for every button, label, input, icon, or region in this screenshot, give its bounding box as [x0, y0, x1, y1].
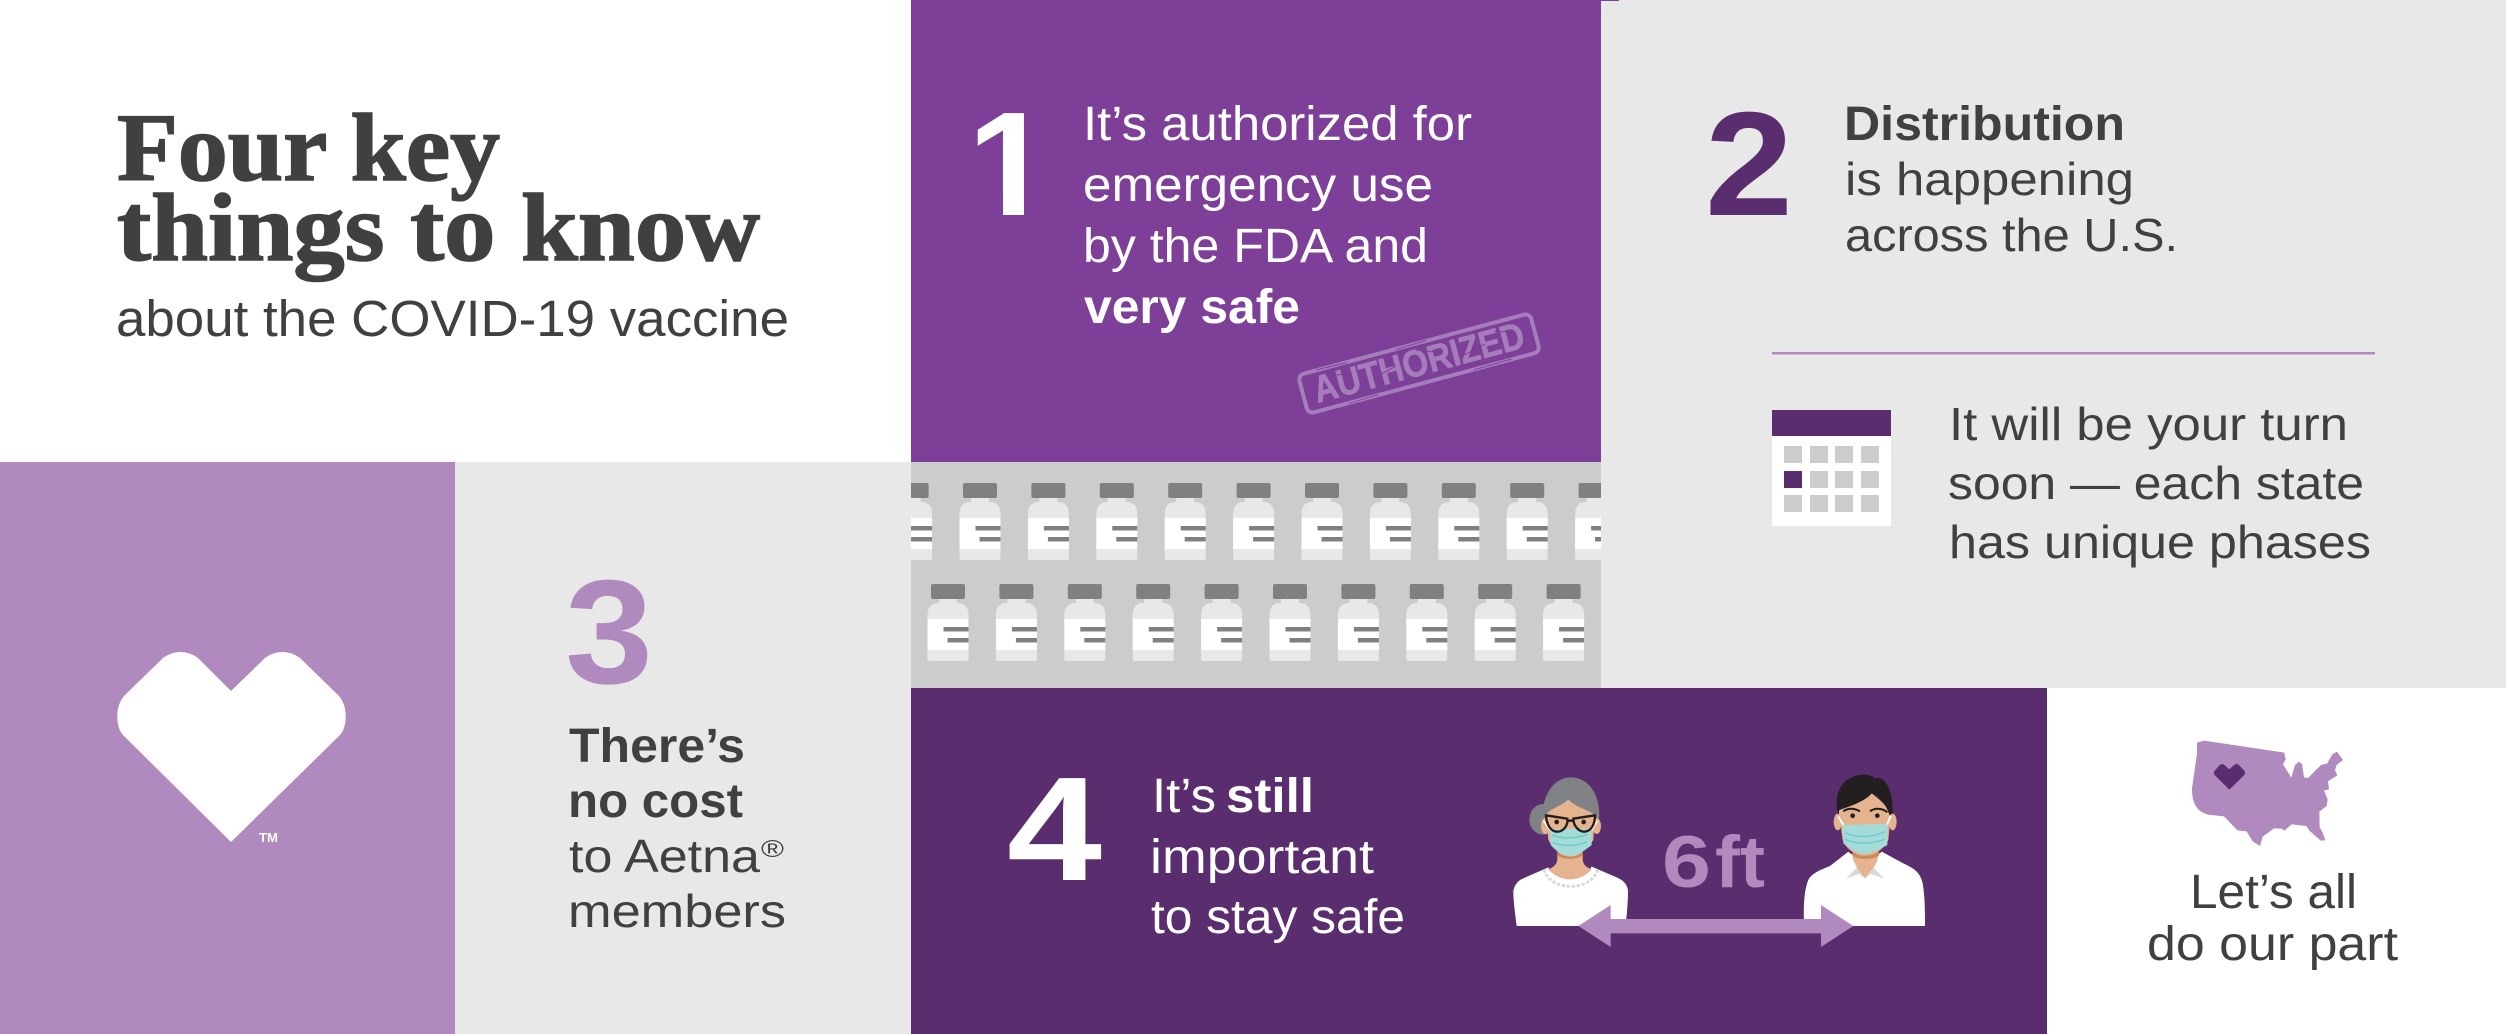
heading: Four key things to know: Four key — [117, 94, 500, 201]
text: no cost: to Aetna — [569, 830, 760, 882]
icon: white heart — [117, 652, 346, 842]
text: distribution — [1844, 98, 2178, 261]
subheading: about the COVID-19 vaccine — [116, 290, 789, 347]
panel: 1 authorized — [911, 0, 1601, 462]
text: do our part: Let’s all — [2190, 866, 2357, 919]
arrow: six feet distance — [1578, 905, 1853, 947]
text: still important: still — [1226, 770, 1314, 823]
text: no cost: There’s — [569, 720, 745, 773]
text: distribution: is happening — [1845, 153, 2134, 205]
panel: 2 distribution — [1601, 0, 2506, 688]
text: your turn: has unique phases — [1949, 516, 2371, 568]
text: authorized for emergency use: very safe — [1084, 281, 1300, 334]
vial row 2 — [928, 584, 1584, 661]
panel: let's all do our part — [2047, 688, 2506, 1034]
text: do our part: do our part — [2147, 918, 2398, 971]
panel: heart logo — [0, 462, 455, 1034]
text: authorized for emergency use: by the FDA and — [1083, 220, 1428, 273]
text: no cost: ® — [761, 836, 784, 863]
text: still important — [1150, 770, 1405, 944]
number 3: 3 — [565, 550, 653, 715]
text: distribution: across the U.S. — [1845, 209, 2178, 261]
text: your turn: soon — each state — [1948, 457, 2364, 509]
text: still important: to stay safe — [1151, 891, 1405, 944]
heading: Four key things to know: things to know — [117, 174, 760, 281]
icon: man with mask — [1804, 775, 1925, 926]
text: still important: important — [1150, 831, 1374, 884]
text: your turn: It will be your turn — [1949, 398, 2348, 450]
icon: US map — [2192, 741, 2343, 846]
text: authorized for emergency use — [1083, 98, 1472, 334]
text: authorized for emergency use: emergency use — [1083, 159, 1433, 212]
icon: authorized stamp: AUTHORIZED — [1309, 315, 1529, 412]
vial row 1 — [891, 483, 1616, 560]
panel: title — [0, 0, 911, 462]
text: authorized for emergency use: It’s authorized for — [1083, 98, 1472, 151]
text: no cost: no cost — [568, 775, 743, 828]
heading: Four key things to know — [117, 94, 760, 281]
number 1: 1 — [967, 82, 1052, 247]
panel: 3 no cost — [455, 462, 911, 1034]
text: do our part — [2147, 866, 2398, 971]
icon: older woman with mask — [1513, 777, 1628, 926]
label: 6 ft — [1662, 822, 1765, 903]
number 2: 2 — [1705, 82, 1793, 247]
icon: calendar — [1772, 410, 1891, 526]
text: still important: It’s — [1152, 770, 1216, 823]
text: no cost — [568, 720, 786, 937]
label: 6 ft: ft — [1715, 822, 1765, 903]
text: no cost: members — [568, 885, 786, 937]
label: 6 ft: 6 — [1662, 822, 1711, 903]
trademark: TM — [259, 830, 278, 845]
panel: 4 stay safe — [911, 688, 2047, 1034]
panel: vaccine vials — [891, 462, 1616, 688]
text: your turn — [1948, 398, 2371, 568]
icon: map heart — [2214, 764, 2245, 790]
text: distribution: Distribution — [1844, 98, 2125, 151]
number 4: 4 — [1007, 747, 1102, 912]
